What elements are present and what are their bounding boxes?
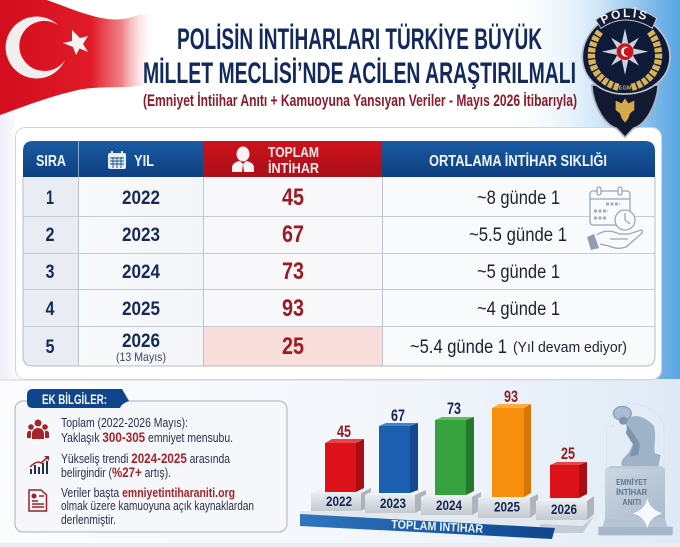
year labels: 2024 <box>436 497 462 513</box>
bar 2025 <box>492 404 531 497</box>
row numbers <box>46 188 55 358</box>
years: 2023 <box>122 225 160 246</box>
icon: calendar in hand <box>587 187 642 250</box>
year labels: 2022 <box>326 493 352 509</box>
year labels <box>326 493 577 517</box>
info text 3 <box>61 486 254 527</box>
bar values: 45 <box>337 422 351 441</box>
bar values: 93 <box>504 387 518 406</box>
monument label: İNTİHAR <box>616 488 647 497</box>
ribbon: toplam intihar <box>300 514 555 539</box>
totals: 25 <box>282 333 304 360</box>
crescent <box>6 16 65 78</box>
table header: TOPLAM <box>268 144 319 161</box>
table body <box>23 177 655 366</box>
row numbers: 5 <box>46 337 55 358</box>
plinths <box>311 488 594 520</box>
icon: person <box>232 146 254 172</box>
years: 2026 <box>122 331 160 352</box>
turkish flag <box>0 0 152 115</box>
year labels: 2026 <box>551 501 577 517</box>
tag: EK BİLGİLER: <box>42 391 107 407</box>
icon: people <box>27 420 49 439</box>
row numbers: 2 <box>46 225 54 246</box>
totals: 67 <box>282 221 304 248</box>
frequency: ~5.4 günde 1 <box>410 337 507 358</box>
sparkle <box>633 498 663 528</box>
icon: chart <box>30 456 49 474</box>
bar values: 67 <box>391 406 405 425</box>
frequency <box>410 188 627 358</box>
lower shield <box>592 85 658 137</box>
totals: 45 <box>282 184 304 211</box>
table header: ORTALAMA İNTİHAR SIKLIĞI <box>429 151 607 170</box>
panel: data table card <box>16 128 662 380</box>
info text 3: derlenmiştir. <box>61 513 116 527</box>
icon: document <box>29 490 46 511</box>
year labels: 2023 <box>380 495 406 511</box>
frequency: (Yıl devam ediyor) <box>513 339 627 356</box>
info text 2: Yükseliş trendi 2024-2025 arasında <box>61 450 230 466</box>
egm label: EGM <box>619 85 632 91</box>
monument label: EMNİYET <box>616 478 647 487</box>
polis banner <box>596 8 657 28</box>
info text 3: Veriler başta emniyetintiharaniti.org <box>61 486 235 500</box>
table header: YIL <box>134 153 154 170</box>
star <box>63 30 88 55</box>
ribbon: toplam intihar: TOPLAM İNTİHAR <box>391 516 484 536</box>
totals: 73 <box>282 258 304 285</box>
stage <box>300 511 596 533</box>
monument statue <box>598 404 673 535</box>
glass case <box>607 404 664 468</box>
bar 2024 <box>435 417 474 495</box>
bar values: 73 <box>447 399 461 418</box>
bar 2023 <box>379 423 418 493</box>
main shield <box>582 13 670 94</box>
bar 2022 <box>325 439 364 492</box>
years: 2025 <box>122 299 160 320</box>
years: (13 Mayıs) <box>116 350 166 364</box>
laurel <box>591 32 618 87</box>
info text 1: Yaklaşık 300-305 emniyet mensubu. <box>61 429 233 445</box>
info text 3: olmak üzere kamuoyuna açık kaynaklardan <box>61 499 254 513</box>
table header: İNTİHAR <box>268 160 319 177</box>
row numbers: 3 <box>46 262 54 283</box>
info text 2 <box>61 450 230 480</box>
row numbers: 4 <box>46 299 55 320</box>
police badge <box>582 7 671 138</box>
bar values: 25 <box>561 444 575 463</box>
police badge: POLİS <box>600 7 646 24</box>
totals <box>282 184 304 360</box>
bar 2026 <box>550 462 587 498</box>
info text 2: belirgindir (%27+ artış). <box>61 464 171 480</box>
years: 2022 <box>122 188 160 209</box>
figure <box>621 416 661 467</box>
panel: ek bilgiler <box>15 389 287 532</box>
icon: calendar <box>108 151 126 169</box>
table header <box>23 141 655 177</box>
star emblem <box>602 28 648 75</box>
bar chart <box>300 387 596 539</box>
years: 2024 <box>122 262 160 283</box>
title <box>143 23 576 90</box>
frequency: ~5.5 günde 1 <box>469 225 567 246</box>
table header: SIRA <box>36 153 66 170</box>
frequency: ~4 günde 1 <box>477 299 560 320</box>
tag <box>27 389 129 408</box>
eagle <box>616 98 634 123</box>
totals: 93 <box>282 295 304 322</box>
info text 1: Toplam (2022-2026 Mayıs): <box>61 416 188 430</box>
info text 1 <box>61 416 233 445</box>
monument label <box>616 478 647 507</box>
pedestal <box>605 466 665 469</box>
years <box>116 188 166 364</box>
frequency: ~5 günde 1 <box>477 262 560 283</box>
bar values <box>337 387 575 463</box>
row numbers: 1 <box>46 188 54 209</box>
frequency: ~8 günde 1 <box>477 188 560 209</box>
year labels: 2025 <box>494 498 520 514</box>
monument label: ANITI <box>622 498 641 507</box>
